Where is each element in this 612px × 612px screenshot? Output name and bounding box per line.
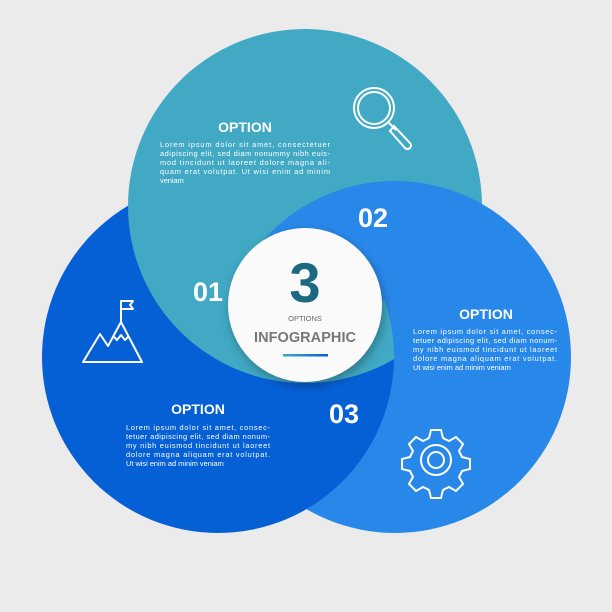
panel: option 1 text (teal): veniam: [160, 176, 184, 185]
panel: option 2 text: OPTION: [459, 306, 513, 322]
icon: gear: [402, 430, 470, 498]
panel: option 3 text: Lorem ipsum dolor sit amet, consec-: [126, 423, 271, 432]
panel: option 3 text: dolore magna aliquam erat volutpat.: [126, 450, 270, 459]
panel: option 3 text: my nibh euismod tincidunt ut laoreet: [126, 441, 270, 450]
venn circles: [42, 29, 571, 533]
panel: option 2 text: my nibh euismod tincidunt ut laoreet: [413, 345, 557, 354]
numbers: 03: [329, 399, 359, 429]
panel: option 2 text: tetuer adipiscing elit, sed diam nonum-: [413, 336, 558, 345]
center circle: OPTIONS: [288, 314, 322, 323]
numbers: 02: [358, 203, 388, 233]
panel: option 2 text: Ut wisi enim ad minim veniam: [413, 363, 511, 372]
panel: option 2 text: [413, 306, 558, 372]
panel: option 1 text (teal): quam erat volutpat. Ut wisi enim ad minim: [160, 167, 330, 176]
panel: option 1 text (teal): [160, 119, 331, 185]
center circle: 3: [289, 251, 321, 314]
panel: option 1 text (teal): OPTION: [218, 119, 272, 135]
numbers: 01: [193, 277, 223, 307]
numbers: [193, 203, 388, 429]
center circle: [228, 228, 382, 382]
panel: option 3 text: [126, 401, 271, 468]
panel: option 3 text: Ut wisi enim ad minim veniam: [126, 459, 224, 468]
icon: magnifier: [354, 88, 411, 149]
icon: mountain flag: [83, 301, 142, 362]
panel: option 1 text (teal): mod tincidunt ut laoreet dolore magna ali-: [160, 158, 331, 167]
center circle: INFOGRAPHIC: [254, 330, 357, 346]
panel: option 2 text: Lorem ipsum dolor sit amet, consec-: [413, 327, 558, 336]
panel: option 3 text: OPTION: [171, 401, 225, 417]
panel: option 1 text (teal): adipiscing elit, sed diam nonummy nibh euis-: [160, 149, 331, 158]
panel: option 2 text: dolore magna aliquam erat volutpat.: [413, 354, 557, 363]
panel: option 1 text (teal): Lorem ipsum dolor sit amet, consectetuer: [160, 140, 331, 149]
panel: option 3 text: tetuer adipiscing elit, sed diam nonum-: [126, 432, 271, 441]
